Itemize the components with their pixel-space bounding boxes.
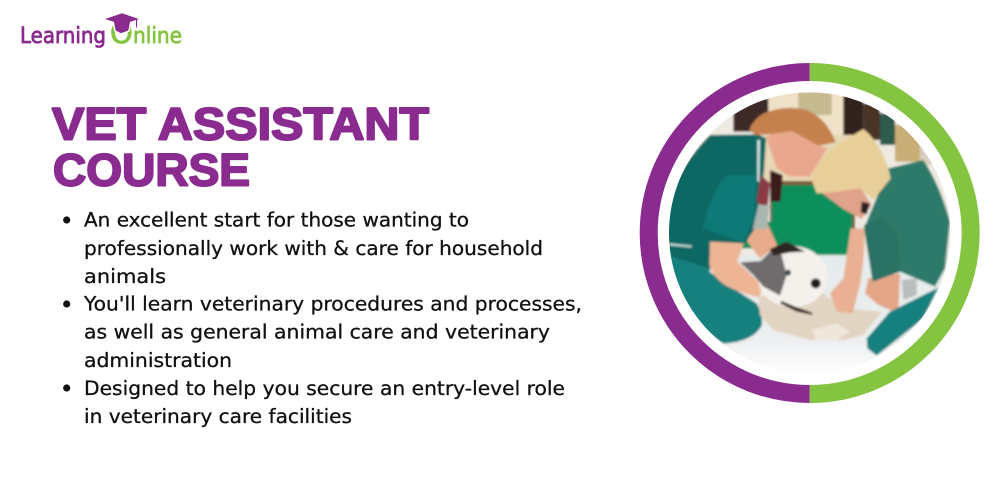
logo: Learning Online bbox=[20, 13, 182, 50]
bullet 1: An excellent start for those wanting to bbox=[84, 208, 469, 232]
title: COURSE bbox=[53, 144, 250, 196]
photo: green board bbox=[770, 181, 855, 258]
icon: graduation cap bbox=[105, 13, 139, 34]
logo wordmark: Online: nline bbox=[133, 23, 182, 49]
bullet 2: administration bbox=[84, 349, 232, 372]
photo: floor bbox=[708, 252, 948, 360]
bullet 2 bbox=[63, 292, 582, 372]
photo: dog bbox=[740, 242, 882, 340]
logo wordmark: Online: O bbox=[110, 16, 133, 50]
ring: green half bbox=[810, 72, 971, 394]
ring: purple half bbox=[649, 72, 810, 394]
photo: right vet bbox=[812, 129, 950, 356]
title: VET ASSISTANT bbox=[52, 98, 429, 150]
title bbox=[52, 98, 429, 196]
bullet 1: animals bbox=[84, 265, 166, 288]
bullet 3: in veterinary care facilities bbox=[84, 405, 352, 428]
logo wordmark: Learning: Learning bbox=[20, 23, 106, 49]
circular ring bbox=[649, 72, 971, 394]
bullet 1 bbox=[63, 208, 543, 288]
bullet 2: as well as general animal care and veterinary bbox=[84, 320, 550, 344]
bullet 3 bbox=[63, 377, 565, 428]
bullet 1: professionally work with & care for household bbox=[84, 237, 543, 260]
bullet 3: Designed to help you secure an entry-level role bbox=[84, 377, 565, 400]
photo: left vet bbox=[665, 108, 836, 344]
bullet 2: You'll learn veterinary procedures and processes, bbox=[83, 292, 582, 316]
photo: two vets with a dog bbox=[669, 92, 950, 360]
bullet list bbox=[63, 208, 582, 428]
